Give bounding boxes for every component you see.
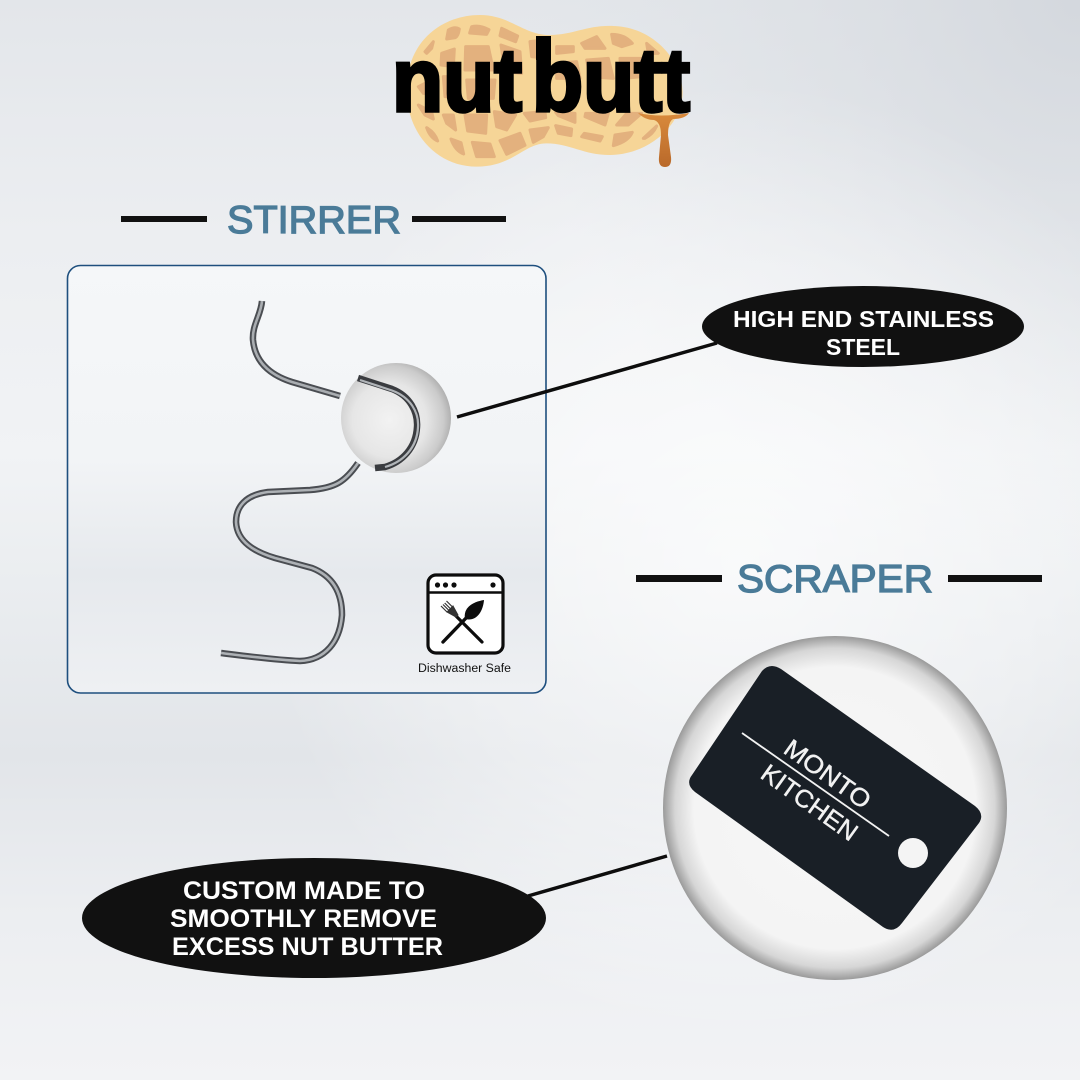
stirrer wire, upper and lower sections [221,301,358,661]
logo wordmark: nut [392,31,522,131]
callout: custom made scraper: EXCESS NUT BUTTER [172,933,443,961]
magnifier circle [663,636,1007,980]
heading rule left [121,216,207,222]
icon: fork [441,601,482,642]
callout: custom made scraper: CUSTOM MADE TO [183,877,425,905]
heading text: STIRRER [227,199,401,242]
heading rule right [412,216,506,222]
heading text: SCRAPER [737,558,933,601]
panel frame [68,266,546,693]
card text: monto: MONTO [779,734,876,815]
card hole [898,838,928,868]
heading rule right [948,575,1042,582]
callout: custom made scraper: SMOOTHLY REMOVE [170,905,437,933]
callout: high end stainless steel: STEEL [826,334,900,360]
logo wordmark [392,31,690,131]
connector line: stainless steel [457,343,717,417]
magnified wire [358,378,418,468]
icon: spoon [443,616,468,642]
card text: kitchen: KITCHEN [756,759,863,847]
dishwasher label: Dishwasher Safe [418,663,511,675]
heading rule left [636,575,722,582]
scraper magnifier [663,636,1007,980]
callout: high end stainless steel: HIGH END STAINLESS [733,306,994,332]
icon: dishwasher safe [428,575,503,653]
caramel drip [638,113,689,167]
callout: custom made scraper [82,858,546,978]
heading: scraper [636,558,1042,601]
callout: high end stainless steel [702,286,1024,367]
connector line: scraper [528,856,667,896]
heading: stirrer [121,199,506,242]
logo: nut butt peanut [392,15,690,167]
logo wordmark: butt [532,31,690,131]
scraper card [689,666,981,930]
magnifier circle [341,363,451,473]
panel: stirrer [68,266,546,693]
card divider [742,733,889,836]
peanut shell [407,15,683,167]
